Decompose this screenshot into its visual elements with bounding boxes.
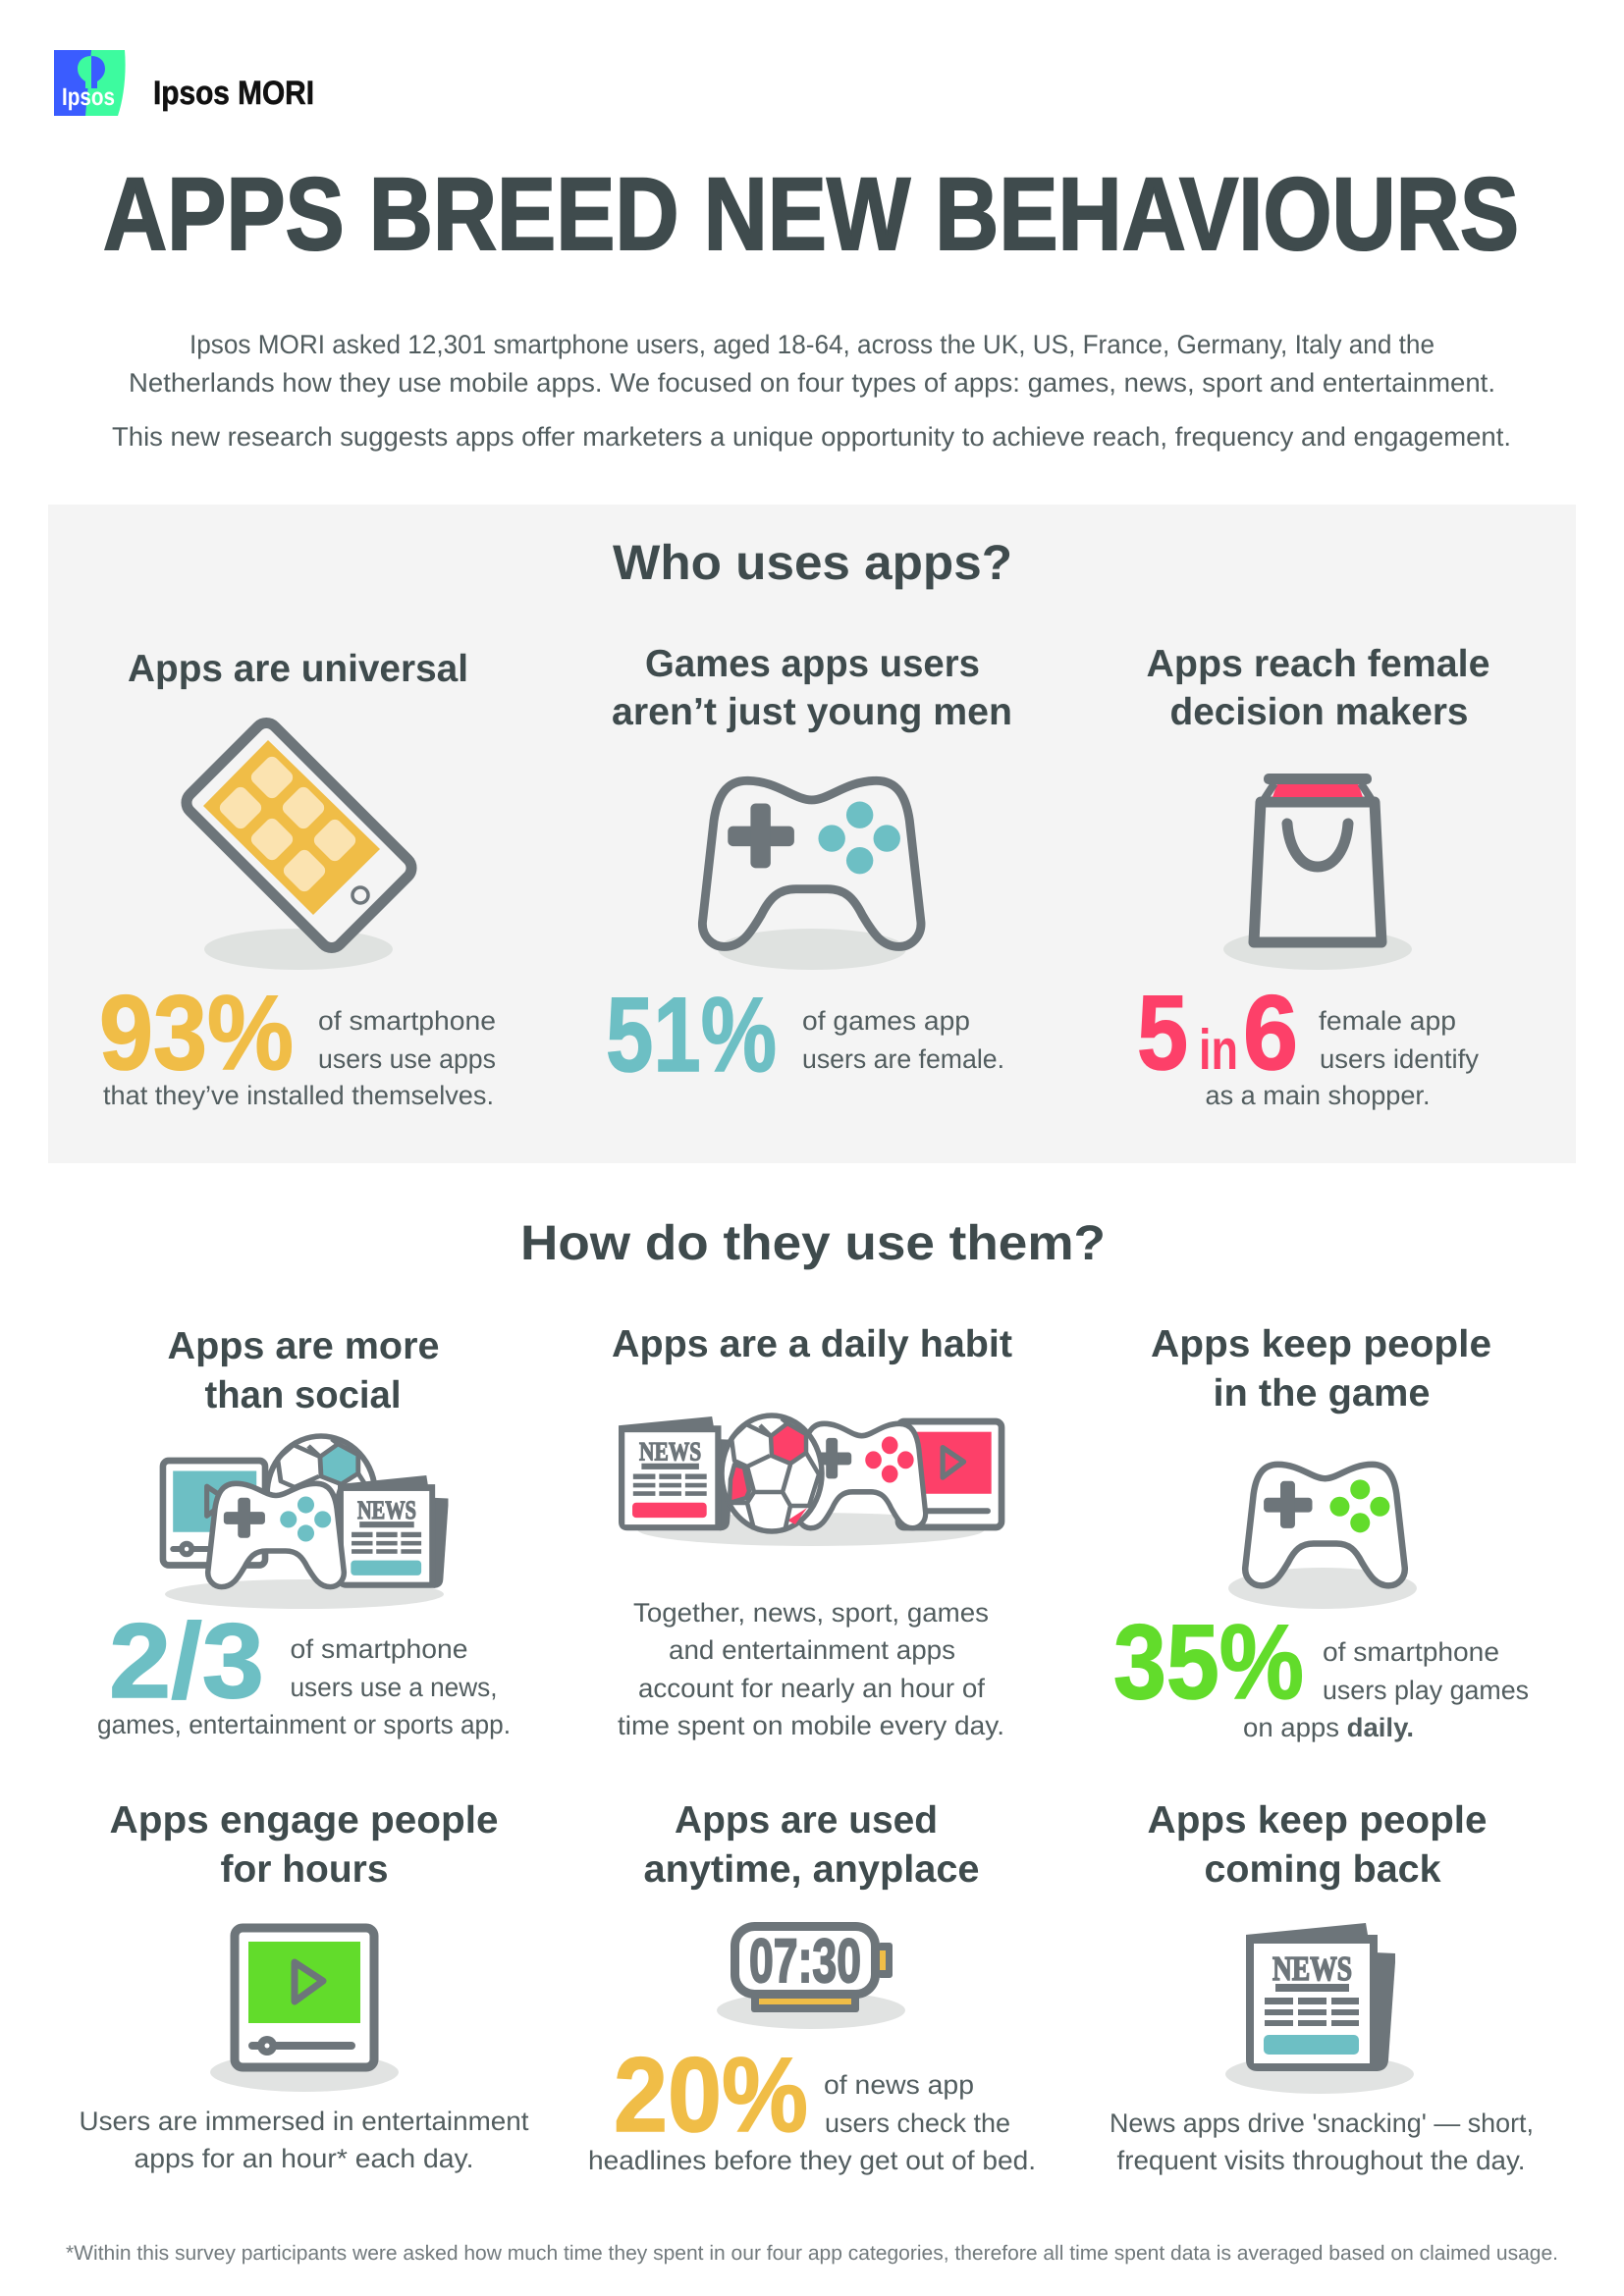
stat text: users use apps bbox=[318, 1044, 496, 1074]
heading: aren’t just young men bbox=[612, 691, 1012, 733]
body text: apps for an hour* each day. bbox=[134, 2144, 473, 2173]
stat: 5 in 6: in bbox=[1199, 1018, 1238, 1082]
stat text: headlines before they get out of bed. bbox=[588, 2146, 1036, 2175]
body text: frequent visits throughout the day. bbox=[1117, 2146, 1526, 2175]
icon: smartphone with app tiles bbox=[182, 718, 416, 970]
heading: anytime, anyplace bbox=[644, 1848, 980, 1891]
heading: coming back bbox=[1204, 1848, 1441, 1891]
logo mark: Ipsos bbox=[62, 83, 115, 111]
icon: shopping bag bbox=[1223, 774, 1412, 970]
intro text: This new research suggests apps offer marketers a unique opportunity to achieve reach, frequency and engagement. bbox=[112, 422, 1511, 452]
stat text bbox=[103, 1006, 496, 1110]
icon: newspaper: NEWS bbox=[1272, 1949, 1352, 1988]
stat: 5 in 6: 6 bbox=[1243, 973, 1298, 1092]
heading bbox=[1151, 1323, 1491, 1415]
heading: Games apps users bbox=[645, 643, 980, 685]
section heading: who uses apps: Who uses apps? bbox=[613, 535, 1012, 590]
stat text: of smartphone bbox=[318, 1006, 496, 1036]
stat text: users identify bbox=[1320, 1044, 1480, 1074]
heading bbox=[1147, 643, 1490, 733]
icon: alarm clock: 07:30 bbox=[749, 1927, 861, 1996]
logo: Ipsos MORI bbox=[54, 50, 314, 116]
intro text bbox=[112, 330, 1511, 452]
stat text bbox=[588, 2070, 1036, 2175]
icon: tablet, ball, news and controller: NEWS bbox=[357, 1496, 416, 1524]
stat text: users check the bbox=[825, 2109, 1010, 2138]
icon: video tablet bbox=[210, 1928, 399, 2092]
heading: Apps reach female bbox=[1147, 643, 1490, 685]
heading: in the game bbox=[1214, 1372, 1430, 1415]
card: apps engage people for hours bbox=[79, 1799, 529, 2173]
heading bbox=[1147, 1799, 1487, 1891]
stat text: users use a news, bbox=[291, 1673, 497, 1702]
stat text bbox=[802, 1006, 1004, 1074]
body text: time spent on mobile every day. bbox=[618, 1711, 1004, 1740]
body text bbox=[79, 2107, 529, 2173]
stat text bbox=[1243, 1637, 1529, 1742]
card: apps keep people in the game bbox=[1113, 1323, 1529, 1742]
heading bbox=[110, 1799, 498, 1891]
icon: news, ball, controller and tablet bbox=[619, 1415, 1001, 1546]
card: apps reach female decision makers bbox=[1137, 643, 1490, 1110]
stat: 51%: 51% bbox=[606, 975, 777, 1094]
card: games apps users bbox=[606, 643, 1012, 1094]
heading: than social bbox=[204, 1374, 401, 1416]
stat text: of smartphone bbox=[1323, 1637, 1499, 1667]
stat text bbox=[97, 1634, 511, 1739]
panel: who uses apps bbox=[48, 505, 1576, 1163]
heading: Apps are a daily habit bbox=[612, 1323, 1012, 1365]
body text: Users are immersed in entertainment bbox=[79, 2107, 529, 2136]
body text: account for nearly an hour of bbox=[638, 1674, 986, 1703]
body text bbox=[618, 1598, 1004, 1740]
stat: 35%: 35% bbox=[1113, 1602, 1304, 1721]
heading: Apps are more bbox=[167, 1325, 440, 1367]
stat: 5 in 6 bbox=[1137, 973, 1298, 1092]
body text: and entertainment apps bbox=[669, 1635, 955, 1665]
heading: Apps are universal bbox=[128, 648, 468, 690]
heading bbox=[612, 643, 1012, 733]
card: apps are used anytime, anyplace bbox=[588, 1799, 1036, 2175]
stat text: users are female. bbox=[802, 1044, 1004, 1074]
heading: Apps engage people bbox=[110, 1799, 498, 1842]
body text: News apps drive 'snacking' — short, bbox=[1110, 2109, 1534, 2138]
heading bbox=[167, 1325, 440, 1416]
card: apps keep people coming back bbox=[1110, 1799, 1534, 2175]
stat: 93%: 93% bbox=[99, 973, 294, 1092]
icon: newspaper bbox=[1225, 1923, 1414, 2094]
stat text: on apps daily. bbox=[1243, 1713, 1414, 1742]
card: apps are universal bbox=[99, 648, 496, 1110]
footnote: *Within this survey participants were asked how much time they spent in our four app categories, therefore all time spent data is averaged based on claimed usage. bbox=[66, 2242, 1558, 2265]
stat: 20%: 20% bbox=[614, 2035, 808, 2154]
stat text: users play games bbox=[1323, 1676, 1529, 1705]
card: apps are a daily habit bbox=[612, 1323, 1012, 1740]
body text: Together, news, sport, games bbox=[633, 1598, 989, 1628]
stat: 2/3: 2/3 bbox=[109, 1601, 264, 1720]
body text bbox=[1110, 2109, 1534, 2175]
logo wordmark: Ipsos MORI bbox=[153, 75, 314, 112]
stat text: as a main shopper. bbox=[1206, 1081, 1430, 1110]
heading: for hours bbox=[220, 1848, 389, 1891]
stat text: games, entertainment or sports app. bbox=[97, 1710, 511, 1739]
heading: Apps are used bbox=[675, 1799, 938, 1842]
icon: game controller bbox=[1228, 1465, 1417, 1609]
stat text: of smartphone bbox=[291, 1634, 467, 1664]
stat text bbox=[1206, 1006, 1480, 1110]
stat text: that they’ve installed themselves. bbox=[103, 1081, 494, 1110]
section heading: how do they use them: How do they use them? bbox=[520, 1215, 1106, 1270]
heading: Apps keep people bbox=[1151, 1323, 1491, 1365]
stat: 5 in 6: 5 bbox=[1137, 973, 1188, 1092]
logo mark bbox=[54, 50, 126, 116]
heading: Apps keep people bbox=[1147, 1799, 1487, 1842]
intro text: Netherlands how they use mobile apps. We focused on four types of apps: games, news, sport and entertainment. bbox=[129, 368, 1495, 398]
heading bbox=[644, 1799, 980, 1891]
card: apps are more than social bbox=[97, 1325, 511, 1739]
icon: news, ball, controller and tablet: NEWS bbox=[639, 1437, 701, 1467]
icon: game controller bbox=[702, 780, 921, 970]
icon: alarm clock bbox=[717, 1926, 905, 2029]
heading: decision makers bbox=[1170, 691, 1469, 733]
icon: tablet, ball, news and controller bbox=[163, 1436, 448, 1609]
intro text: Ipsos MORI asked 12,301 smartphone users, aged 18-64, across the UK, US, France, Germany, Italy and the bbox=[189, 330, 1435, 359]
stat text: female app bbox=[1319, 1006, 1456, 1036]
stat text: of news app bbox=[824, 2070, 974, 2100]
stat text: of games app bbox=[802, 1006, 970, 1036]
